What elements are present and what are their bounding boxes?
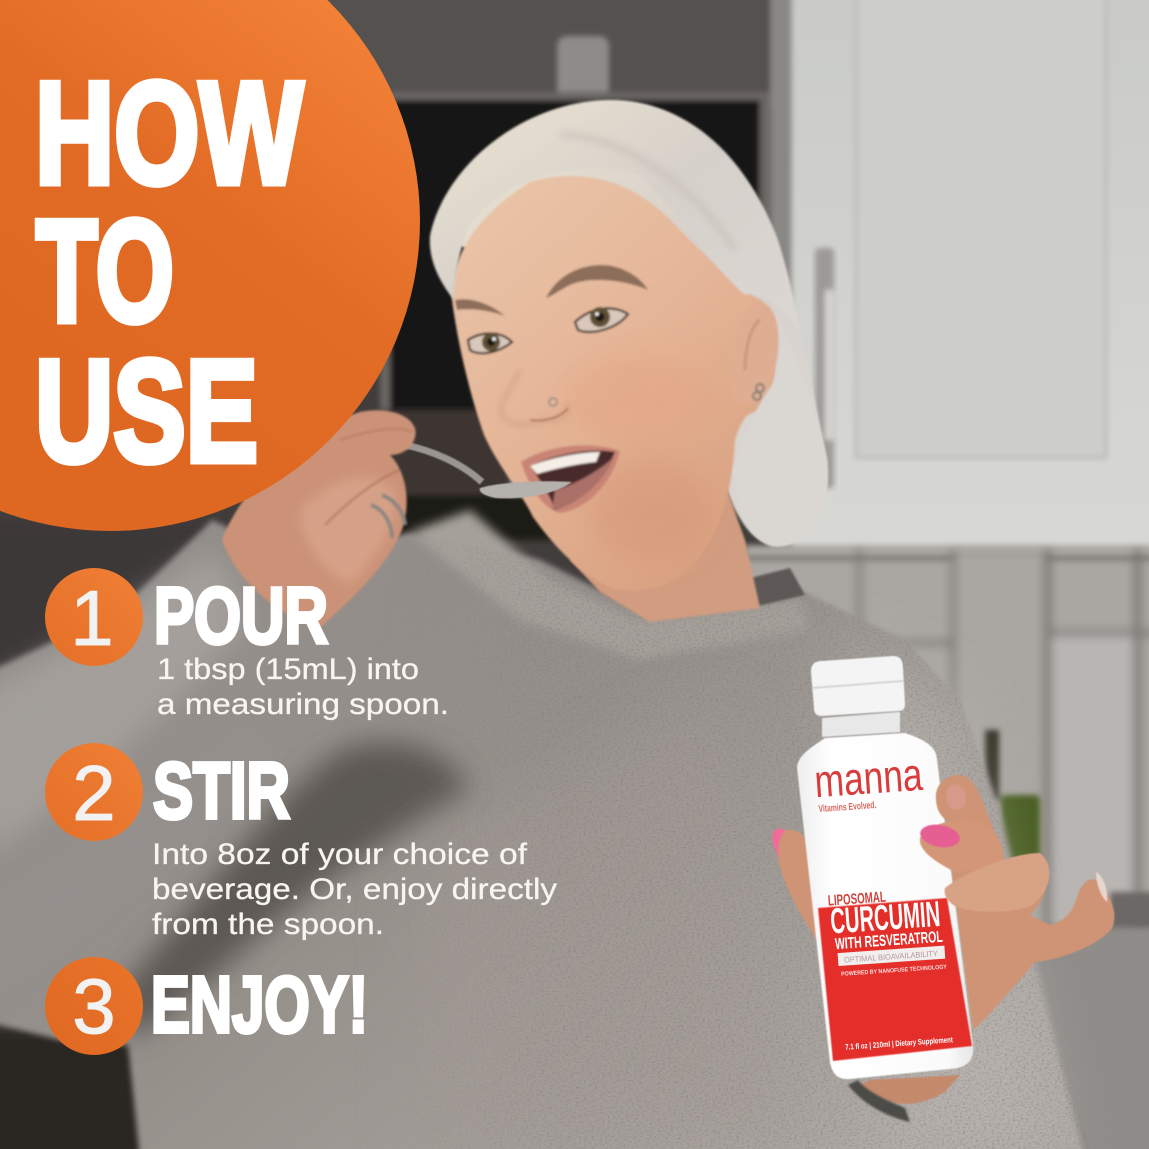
- title line TO: TO: [36, 190, 174, 352]
- step 1 badge: [45, 568, 143, 666]
- spoon: [405, 445, 572, 498]
- title line USE: USE: [35, 330, 258, 492]
- volume line: 7.1 fl oz | 210ml | Dietary Supplement: [845, 1035, 953, 1052]
- white cabinet door: [745, 0, 1149, 557]
- step 3 heading: ENJOY!: [151, 960, 368, 1049]
- eyebrow left: [455, 299, 505, 316]
- step 1 description: 1 tbsp (15mL) into: [157, 653, 419, 686]
- step 3 badge: 3: [72, 962, 116, 1050]
- upper cabinet behind the microwave: [300, 0, 800, 110]
- green bottle in the background: [985, 730, 1040, 865]
- hair front: [430, 100, 828, 546]
- index finger: [936, 775, 1000, 850]
- resveratrol: WITH RESVERATROL: [834, 929, 943, 953]
- rings: [371, 505, 392, 538]
- nose: [501, 370, 568, 425]
- step 3 badge: [45, 957, 143, 1055]
- fingers in front of the bottle: [772, 775, 1107, 912]
- title line HOW: HOW: [35, 52, 303, 214]
- earrings: [756, 384, 764, 392]
- face: [452, 176, 779, 591]
- step 1 description: a measuring spoon.: [157, 688, 449, 721]
- counter: [1030, 925, 1149, 1149]
- product bottle: [797, 656, 973, 1079]
- sweater body: [0, 510, 1090, 1149]
- mouth: [521, 445, 620, 513]
- ear: [731, 302, 779, 404]
- step 2 description: from the spoon.: [152, 908, 384, 941]
- eye left: [468, 334, 512, 353]
- neck: [570, 470, 760, 622]
- step 1 heading: POUR: [154, 571, 328, 660]
- dark left wall: [0, 520, 230, 690]
- cabinet handle, dark area: [557, 36, 609, 106]
- hand holding the bottle: palm and thumb: [775, 830, 1114, 1104]
- title: HOW TO USE: [35, 52, 303, 492]
- nails: [944, 782, 968, 812]
- microwave: [380, 92, 772, 540]
- knit texture: [453, 544, 1087, 1149]
- step 2: stir: [45, 743, 565, 941]
- orange header circle: [0, 0, 420, 531]
- crease shadow: [120, 742, 470, 1040]
- curcumin: CURCUMIN: [829, 893, 942, 941]
- optimal bioavailability pill: OPTIMAL BIOAVAILABILITY: [844, 949, 939, 965]
- red label: [818, 898, 972, 1061]
- bottle cap: [811, 656, 905, 737]
- tagline: Vitamins Evolved.: [818, 800, 877, 815]
- undershirt at collar: [750, 568, 805, 606]
- teeth: [530, 452, 600, 474]
- bottle text: [813, 747, 953, 1053]
- step 1 badge: 1: [70, 574, 114, 662]
- middle finger: [920, 820, 1004, 872]
- raised hand: [222, 410, 416, 628]
- cabinet door handle: [815, 248, 834, 488]
- eye right: [575, 308, 628, 332]
- step 2 badge: [45, 743, 143, 841]
- step 3: enjoy: [45, 957, 368, 1055]
- step 2 description: Into 8oz of your choice of: [152, 838, 528, 871]
- hair back: [445, 102, 828, 546]
- step 2 heading: STIR: [153, 746, 290, 835]
- bottle body: [797, 733, 973, 1079]
- tile wall: [730, 550, 1149, 970]
- nanofuse: POWERED BY NANOFUSE TECHNOLOGY: [841, 965, 947, 978]
- step 1: pour: [45, 568, 449, 721]
- brand name: manna: [813, 748, 924, 807]
- eyebrow right: [546, 265, 648, 298]
- tongue: [552, 457, 614, 510]
- ring finger: [945, 853, 1049, 912]
- cheek blush: [565, 355, 715, 445]
- step 2 description: beverage. Or, enjoy directly: [152, 873, 557, 906]
- liposomal: LIPOSOMAL: [827, 889, 886, 910]
- nose ring: [549, 398, 557, 406]
- bracelet: [848, 1080, 910, 1122]
- step 2 badge: 2: [72, 749, 116, 837]
